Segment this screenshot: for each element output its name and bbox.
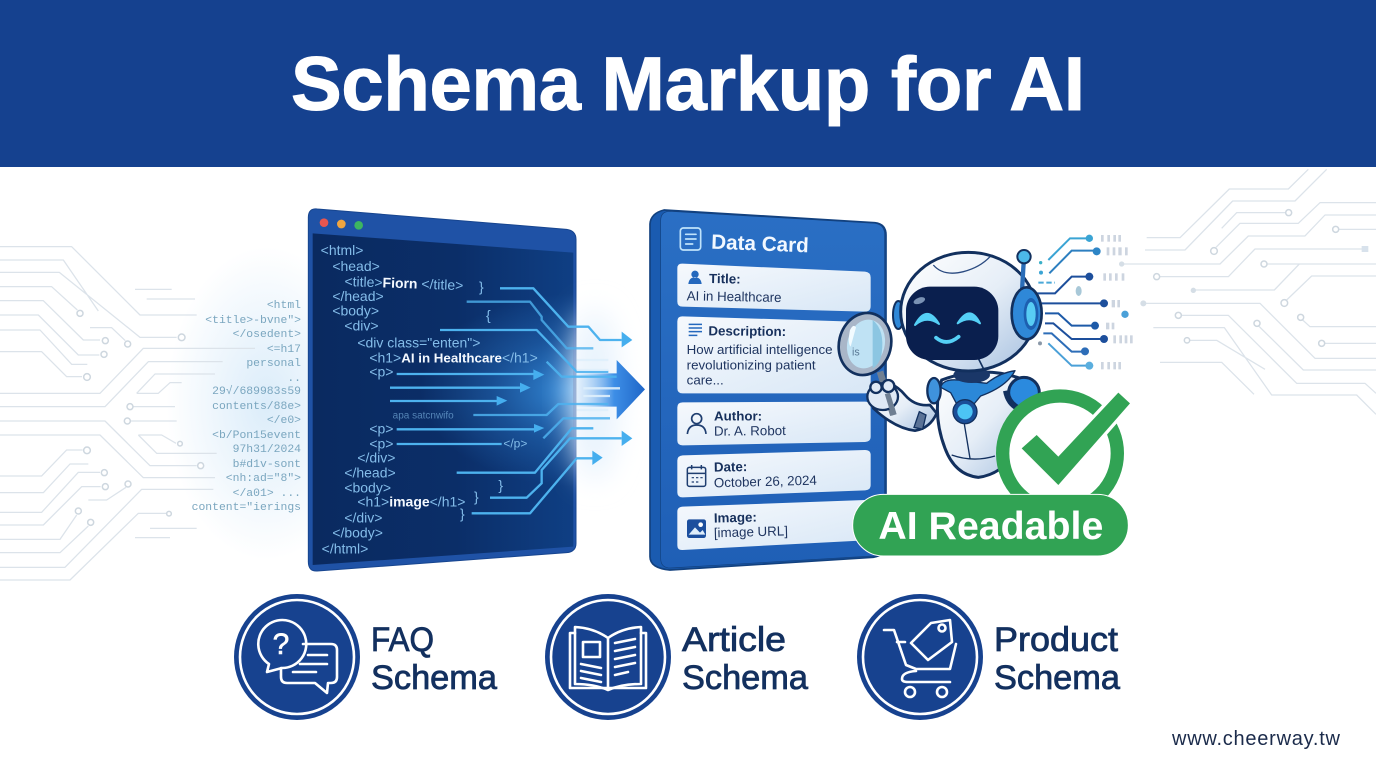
left faded code text: 97h31/2024 [233,444,301,456]
left background circuit lines [0,247,367,580]
code lines: </p> [503,436,527,450]
code lines [321,242,538,556]
card back edge [650,210,886,570]
code lines: </body> [332,524,383,540]
colored circuit lines beside robot [1037,235,1133,370]
row: date [677,450,871,497]
label: Article [682,621,786,659]
left faded code text: <title>-bvne"> [205,315,301,327]
card heading: Data Card [711,231,809,257]
row: image: [image URL] [714,523,788,540]
right background circuit lines [1119,169,1376,414]
left faded code text: </e0> [267,415,301,427]
row: title: AI in Healthcare [687,288,782,305]
FAQ schema item [234,594,497,720]
label: Product [994,621,1119,659]
data flow arrows [390,288,645,513]
row: date: Date: [714,459,747,475]
code lines: } [474,489,479,505]
left faded code text: contents/88e> [212,401,301,413]
code lines: } [498,477,503,493]
icon: document [680,228,701,250]
row: description: How artificial intelligence [687,342,833,357]
icon: cart with tag [857,594,983,720]
article schema item: Schema [682,659,808,697]
badge pill [853,494,1128,556]
code lines: <head> [332,258,380,274]
code lines: </div> [344,510,382,526]
row: author [677,402,871,445]
code lines: <title>Fiorn </title> [344,273,464,293]
row: date: October 26, 2024 [714,473,818,490]
code lines: </head> [332,288,384,304]
robot head [893,252,1036,371]
magnifying glass: is [852,346,860,358]
robot arm [873,382,937,431]
row: title [677,264,871,312]
left faded code text: .. [287,373,301,385]
robot with magnifying glass [831,250,1042,477]
row: image [677,500,871,550]
card face [661,211,885,568]
left faded code text [192,300,301,514]
icon: FAQ chat bubbles [234,594,360,720]
code lines: <p> [369,420,393,436]
AI Readable badge [853,393,1130,556]
robot antenna and headphone [1012,250,1042,339]
code window panel [308,208,576,572]
code lines: </head> [344,464,396,480]
data card panel [650,210,886,570]
code area [313,233,573,565]
row: title: Title: [709,271,741,287]
code lines: <html> [321,242,363,258]
code lines: <div class="enten"> [357,334,480,350]
left faded code text: <=h17 [267,344,301,356]
robot chest [941,371,1015,404]
white glow over window edge [571,310,619,480]
code lines: <body> [344,479,391,495]
left faded code text: </a01> ... [233,488,301,500]
left faded code text: content="ierings [192,502,301,514]
green check mark [1022,393,1130,485]
code lines: </div> [357,450,395,466]
code lines: <body> [332,302,379,318]
left faded code text: <b/Pon15event [212,430,301,442]
row: author: Author: [714,408,762,423]
title: Schema Markup for AI [291,42,1085,127]
row: description: care... [687,372,724,387]
code lines: } [479,279,484,295]
FAQ schema item: Schema [371,659,497,697]
badge label: AI Readable [878,505,1103,548]
row: description: Description: [708,323,786,339]
left faded code text: 29√/689983s59 [212,384,301,398]
code lines: <h1>image</h1> [357,494,465,510]
header banner [0,0,1376,167]
code lines: </html> [322,540,368,556]
code lines: } [460,505,465,521]
robot shoulders [1009,377,1039,408]
magnifying glass [831,306,899,415]
robot body [937,372,1033,477]
row: image: Image: [714,510,757,526]
code lines: <div> [344,318,379,334]
left faded code text: b#d1v-sont [233,459,301,471]
left faded code text: <nh:ad="8"> [226,473,301,485]
left faded code text: <html [267,300,301,312]
window buttons [320,218,363,230]
website url: www.cheerway.tw [1171,728,1341,750]
product schema item: Schema [994,659,1120,697]
product schema item [857,594,1120,720]
row: description [677,316,871,393]
left faded code text: personal [246,358,301,370]
code lines: <p> [369,435,393,451]
icon: open book [545,594,671,720]
code lines: { [486,307,491,323]
beam glow [436,307,574,474]
code lines: apa satcnwifo [393,410,454,421]
label: FAQ [371,621,434,659]
article schema item [545,594,808,720]
robot hand [867,380,898,415]
icon: FAQ chat bubbles: ? [273,628,289,661]
big central arrow [577,360,645,419]
left faded code text: </osedent> [233,329,301,341]
code lines: <h1>AI in Healthcare</h1> [369,349,538,365]
card heading [680,228,809,257]
row: author: Dr. A. Robot [714,423,786,439]
green ring [1003,396,1117,511]
robot chest light [953,400,977,424]
row: description: revolutionizing patient [687,357,816,372]
window frame [308,209,576,571]
code lines: <p> [369,364,393,380]
